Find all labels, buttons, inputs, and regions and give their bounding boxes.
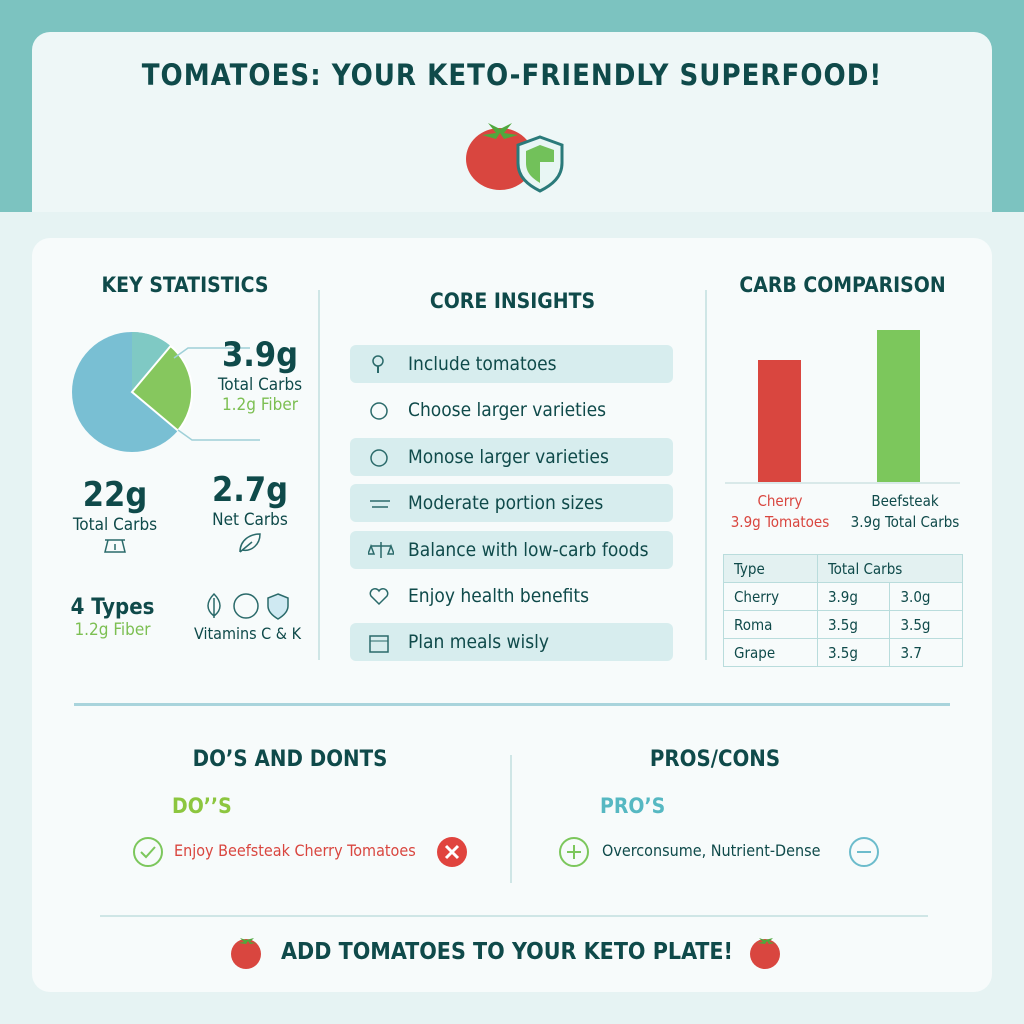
footer callout — [231, 938, 780, 969]
icon: tomato right — [750, 938, 780, 969]
stat 3.9g — [218, 335, 302, 415]
table: 3.7 — [900, 644, 922, 662]
stat 2.7g — [212, 470, 288, 553]
table: Type — [734, 560, 765, 578]
subheading: DO’’S — [172, 794, 232, 818]
title: TOMATOES: YOUR KETO-FRIENDLY SUPERFOOD! — [142, 58, 882, 92]
table: 3.9g — [828, 588, 858, 606]
stat 22g — [72, 475, 157, 553]
text: Monose larger varieties — [408, 446, 609, 468]
table: 3.0g — [900, 588, 930, 606]
header card — [32, 32, 992, 212]
text: Plan meals wisly — [408, 631, 549, 653]
text: Balance with low-carb foods — [408, 539, 649, 561]
item — [559, 837, 879, 867]
table: 3.5g — [828, 644, 858, 662]
table: Grape — [734, 644, 775, 662]
subheading: PRO’S — [600, 794, 665, 818]
heading: CARB COMPARISON — [739, 273, 946, 297]
heading: KEY STATISTICS — [102, 273, 268, 297]
stat 2.7g: 2.7g — [212, 470, 288, 510]
bar labels: Cherry — [757, 492, 803, 510]
stat vitamins — [194, 593, 302, 643]
stat 3.9g: 3.9g — [222, 335, 298, 375]
text: Choose larger varieties — [408, 399, 606, 421]
heading: CORE INSIGHTS — [430, 289, 595, 313]
table: Roma — [734, 616, 772, 634]
stat 2.7g: Net Carbs — [212, 510, 288, 530]
main card — [32, 238, 992, 992]
stat 22g: 22g — [83, 475, 147, 515]
bar labels — [731, 492, 829, 531]
panel: pros/cons — [559, 747, 879, 867]
panel: carb comparison: 3.9g Total Carbs — [851, 513, 959, 531]
text: Moderate portion sizes — [408, 492, 603, 514]
bar chart — [725, 330, 960, 484]
stat vitamins: Vitamins C & K — [194, 624, 301, 643]
insight rows: Include tomatoes — [408, 353, 557, 375]
item: Overconsume, Nutrient-Dense — [602, 841, 820, 860]
panel: key statistics — [71, 273, 302, 643]
item: Enjoy Beefsteak Cherry Tomatoes — [174, 841, 416, 860]
table: 3.5g — [828, 616, 858, 634]
table: Cherry — [734, 588, 779, 606]
table: Total Carbs — [828, 560, 902, 578]
icon: tomato with shield — [466, 123, 564, 193]
panel: carb comparison: Beefsteak — [871, 492, 939, 510]
stat 4 types: 1.2g Fiber — [74, 620, 151, 640]
icon: tomato left — [231, 938, 261, 969]
panel: dos and donts — [133, 747, 467, 867]
stat 4 types — [71, 595, 154, 640]
pie chart — [72, 332, 260, 452]
insight rows — [350, 345, 673, 383]
stat 22g: Total Carbs — [73, 515, 157, 535]
panel: carb comparison — [723, 273, 963, 667]
table — [723, 554, 963, 667]
stat 4 types: 4 Types — [71, 595, 154, 620]
table: 3.5g — [900, 616, 930, 634]
heading: PROS/CONS — [650, 747, 780, 772]
text: Enjoy health benefits — [408, 585, 589, 607]
stat 3.9g: Total Carbs — [218, 375, 302, 395]
header band — [0, 0, 1024, 212]
footer text: ADD TOMATOES TO YOUR KETO PLATE! — [281, 939, 733, 965]
heading: DO’S AND DONTS — [193, 747, 387, 772]
bar labels: 3.9g Tomatoes — [731, 513, 829, 531]
item — [133, 837, 467, 867]
stat 3.9g: 1.2g Fiber — [222, 395, 298, 415]
